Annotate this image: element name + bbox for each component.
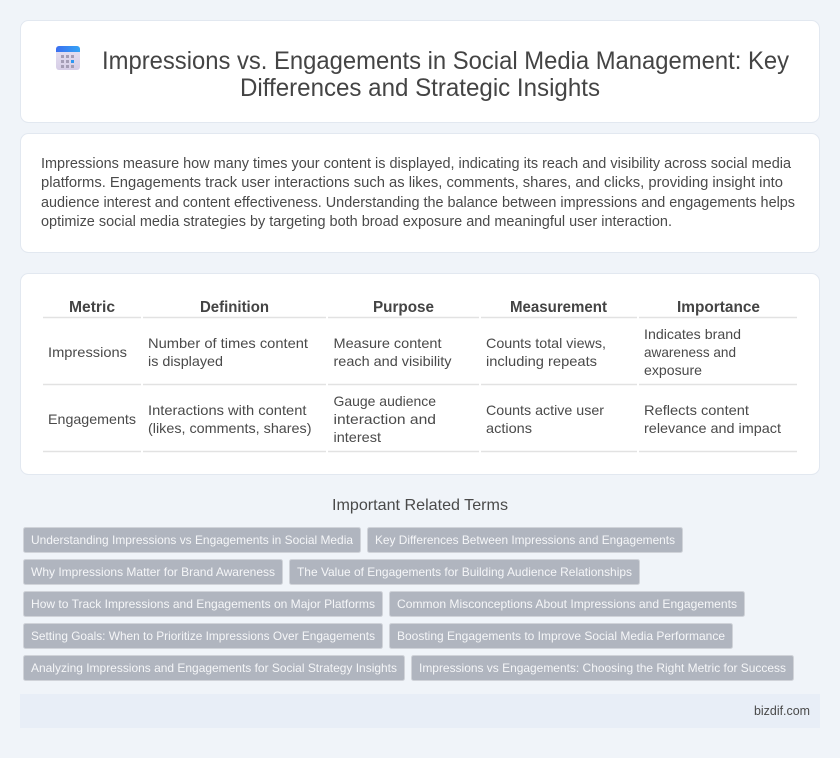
table row: impressions: Impressions	[48, 344, 127, 360]
table header row	[69, 299, 760, 316]
chip: The Value of Engagements for Building Audience Relationships	[297, 565, 632, 579]
panel: comparison table	[20, 274, 820, 474]
table row: impressions: is displayed	[148, 353, 223, 369]
table row: engagements: actions	[486, 420, 532, 436]
chip	[24, 656, 404, 680]
chip	[390, 592, 744, 616]
chip	[24, 592, 382, 616]
chip	[412, 656, 794, 680]
chip	[368, 528, 682, 552]
chip	[24, 560, 282, 584]
table header row: Definition	[200, 299, 269, 316]
chip: Key Differences Between Impressions and Engagements	[375, 533, 675, 547]
text block: intro: platforms. Engagements track user interactions such as likes, comments, shares, and clicks, providing insight into	[41, 175, 783, 191]
table row: impressions: exposure	[644, 362, 702, 378]
table row: engagements: Interactions with content	[148, 402, 307, 418]
title	[102, 47, 789, 102]
text block: intro: audience interest and content effectiveness. Understanding the balance between impressions and engagements helps	[41, 195, 795, 211]
chip	[24, 624, 382, 648]
table row: engagements: Reflects content	[644, 402, 749, 418]
text block: intro: Impressions measure how many times your content is displayed, indicating its reach and visibility across social media	[41, 156, 791, 172]
footer: site name: bizdif.com	[754, 703, 810, 718]
table row: engagements: Counts active user	[486, 402, 604, 418]
title: Impressions vs. Engagements in Social Media Management: Key	[102, 47, 789, 75]
table row: impressions: Indicates brand	[644, 326, 741, 342]
chip: Common Misconceptions About Impressions and Engagements	[397, 597, 737, 611]
chip: Analyzing Impressions and Engagements for Social Strategy Insights	[31, 661, 397, 675]
table row: engagements	[48, 393, 781, 445]
chip: Understanding Impressions vs Engagements in Social Media	[31, 533, 353, 547]
table header row: Purpose	[373, 299, 434, 316]
title: Differences and Strategic Insights	[240, 74, 600, 102]
table row: impressions	[48, 326, 741, 378]
table row: impressions: including repeats	[486, 353, 597, 369]
chip: Why Impressions Matter for Brand Awareness	[31, 565, 275, 579]
table row: engagements: Gauge audience	[334, 393, 436, 409]
table row: impressions: reach and visibility	[334, 353, 452, 369]
table row: impressions: Measure content	[334, 335, 442, 351]
table row: engagements: (likes, comments, shares)	[148, 420, 312, 436]
chip: How to Track Impressions and Engagements on Major Platforms	[31, 597, 375, 611]
footer band	[20, 694, 820, 728]
panel: intro paragraph	[20, 134, 820, 252]
table header row: Metric	[69, 299, 115, 316]
chip: Impressions vs Engagements: Choosing the Right Metric for Success	[419, 661, 786, 675]
table row: impressions: Number of times content	[148, 335, 308, 351]
text block: intro	[41, 156, 795, 230]
panel: title header	[20, 20, 820, 122]
table row: engagements: interaction and	[334, 411, 436, 427]
table row: impressions: Counts total views,	[486, 335, 606, 351]
table row: engagements: interest	[334, 429, 381, 445]
chip	[290, 560, 640, 584]
heading: important related terms: Important Related Terms	[332, 497, 508, 514]
table row: impressions: awareness and	[644, 344, 736, 360]
chip: Setting Goals: When to Prioritize Impressions Over Engagements	[31, 629, 375, 643]
chip	[24, 528, 360, 552]
table header row: Importance	[677, 299, 760, 316]
chip: Boosting Engagements to Improve Social Media Performance	[397, 629, 725, 643]
table row: engagements: Engagements	[48, 411, 136, 427]
text block: intro: optimize social media strategies by targeting both broad exposure and meaningful user interaction.	[41, 214, 672, 230]
table header row: Measurement	[510, 299, 608, 316]
related term chips	[24, 528, 794, 680]
icon: calendar	[56, 46, 80, 70]
chip	[390, 624, 732, 648]
table row: engagements: relevance and impact	[644, 420, 781, 436]
